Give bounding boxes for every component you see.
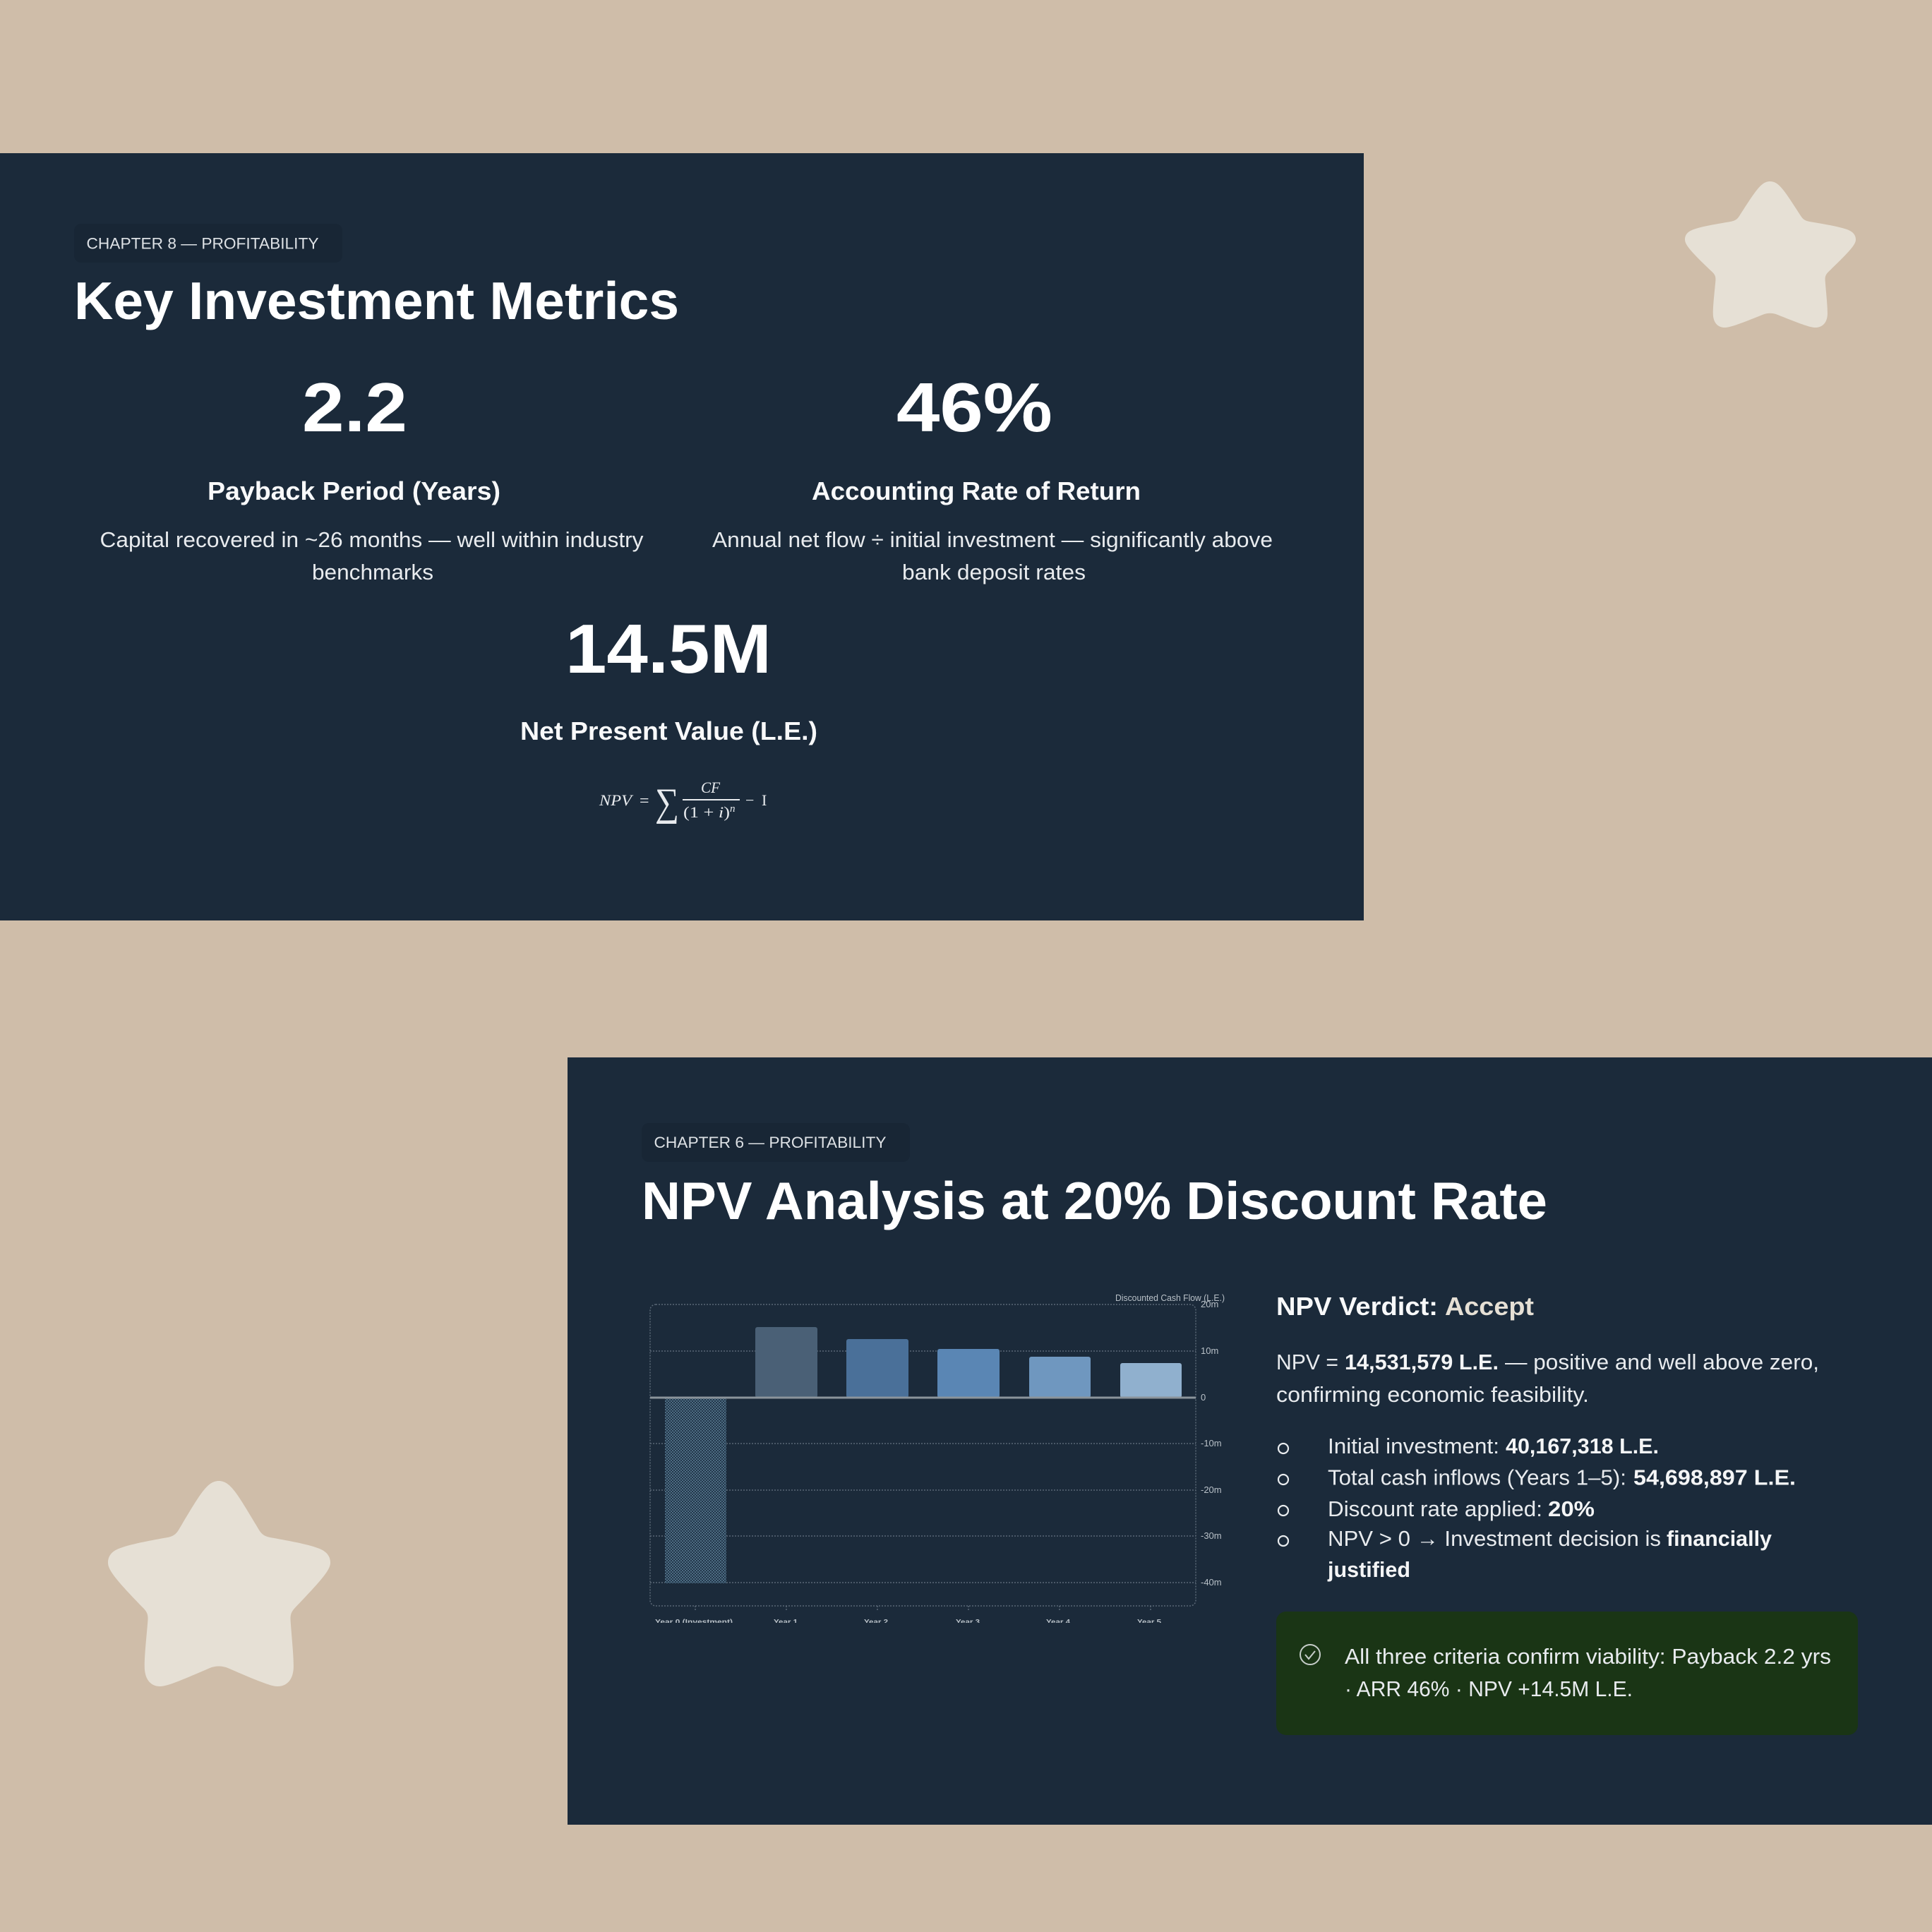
- heading: NPV verdict: [1276, 1292, 1534, 1321]
- x axis labels: Year 0 (Investment): [655, 1618, 733, 1626]
- metric: payback period: benchmarks: [312, 560, 433, 584]
- chapter badge: CHAPTER 8 — PROFITABILITY: [86, 234, 319, 253]
- bar chart: discounted cash flow: [650, 1292, 1225, 1626]
- metric: accounting rate of return: bank deposit rates: [902, 560, 1086, 584]
- panel: NPV analysis: [568, 1057, 1932, 1825]
- bullet list: NPV inputs: [1278, 1434, 1796, 1582]
- chart title: Discounted Cash Flow (L.E.): [1115, 1292, 1225, 1303]
- metric: payback period: Payback Period (Years): [208, 476, 500, 505]
- metric: accounting rate of return: Accounting Rate of Return: [812, 476, 1141, 505]
- bullet list: NPV inputs: financially: [1667, 1526, 1772, 1551]
- heading: NPV verdict: NPV Verdict:: [1276, 1292, 1438, 1321]
- NPV formula: −: [745, 791, 754, 809]
- NPV formula: NPV: [599, 791, 634, 809]
- decorative star: bottom left: [108, 1481, 330, 1686]
- x axis labels: Year 5: [1137, 1618, 1161, 1626]
- metric: net present value: [520, 610, 817, 824]
- bar: year 1: [755, 1327, 817, 1398]
- heading: NPV verdict: Accept: [1445, 1292, 1534, 1321]
- heading: NPV Analysis at 20% Discount Rate: NPV Analysis at 20% Discount Rate: [642, 1171, 1547, 1230]
- chapter badge: [74, 224, 342, 263]
- bar: year 5: [1120, 1363, 1182, 1398]
- bullet list: NPV inputs: NPV > 0 → Investment decision is: [1328, 1526, 1661, 1551]
- NPV formula: (1 + i): [683, 803, 730, 821]
- metric: payback period: 2.2: [302, 368, 407, 446]
- y axis labels: -10m: [1201, 1438, 1222, 1448]
- bullet list: NPV inputs: Discount rate applied:: [1328, 1496, 1542, 1521]
- metric: accounting rate of return: 46%: [896, 368, 1052, 446]
- bullet list: NPV inputs: 40,167,318 L.E.: [1506, 1434, 1659, 1458]
- x axis labels: Year 1: [774, 1618, 798, 1626]
- text block: NPV summary: [1276, 1350, 1819, 1407]
- bar: year 2: [846, 1339, 908, 1398]
- bullet list: NPV inputs: 54,698,897 L.E.: [1633, 1465, 1796, 1489]
- callout: all three criteria: All three criteria confirm viability: Payback 2.2 yrs: [1345, 1644, 1831, 1669]
- heading: Key Investment Metrics: Key Investment Metrics: [74, 271, 679, 330]
- bullet list: NPV inputs: 20%: [1548, 1496, 1595, 1521]
- y axis labels: -30m: [1201, 1530, 1222, 1541]
- chapter badge: [642, 1123, 910, 1162]
- decorative star: top right: [1685, 181, 1856, 328]
- y axis labels: 20m: [1201, 1299, 1218, 1309]
- x axis labels: Year 3: [956, 1618, 980, 1626]
- text block: NPV summary: NPV =: [1276, 1350, 1338, 1374]
- text block: NPV summary: 14,531,579 L.E.: [1345, 1350, 1499, 1374]
- x axis labels: [655, 1619, 1161, 1623]
- metric: payback period: Capital recovered in ~26 months — well within industry: [100, 527, 644, 552]
- icon: check circle: [1300, 1645, 1320, 1664]
- metric: payback period: [100, 368, 644, 584]
- NPV formula: n: [730, 803, 736, 815]
- bar: year 0: [665, 1398, 726, 1583]
- bullet list: NPV inputs: Total cash inflows (Years 1–5):: [1328, 1465, 1626, 1489]
- y axis labels: 0: [1201, 1392, 1206, 1403]
- text block: NPV summary: — positive and well above zero,: [1505, 1350, 1819, 1374]
- metric: accounting rate of return: Annual net flow ÷ initial investment — significantly above: [712, 527, 1273, 552]
- metric: accounting rate of return: [712, 368, 1273, 584]
- bullet list: NPV inputs: Initial investment:: [1328, 1434, 1499, 1458]
- y axis labels: -20m: [1201, 1484, 1222, 1495]
- text block: NPV summary: confirming economic feasibility.: [1276, 1382, 1589, 1407]
- callout: all three criteria: · ARR 46% · NPV +14.5M L.E.: [1345, 1676, 1633, 1701]
- bullet list: NPV inputs: justified: [1327, 1557, 1410, 1582]
- x axis labels: Year 4: [1046, 1618, 1070, 1626]
- bar: year 4: [1029, 1357, 1091, 1398]
- NPV formula: I: [762, 791, 767, 809]
- y axis labels: [1201, 1299, 1222, 1588]
- NPV formula: ∑: [655, 781, 679, 824]
- bar: year 3: [937, 1349, 1000, 1398]
- x axis labels: Year 2: [864, 1618, 888, 1626]
- metric: net present value: 14.5M: [565, 610, 772, 688]
- NPV formula: CF: [701, 779, 721, 796]
- y axis labels: -40m: [1201, 1577, 1222, 1588]
- callout: all three criteria: [1276, 1612, 1858, 1735]
- chapter badge: CHAPTER 6 — PROFITABILITY: [654, 1134, 887, 1151]
- NPV formula: [599, 779, 767, 824]
- y axis labels: 10m: [1201, 1345, 1218, 1356]
- panel: key investment metrics: [0, 153, 1364, 920]
- metric: net present value: Net Present Value (L.E.): [520, 716, 817, 745]
- NPV formula: =: [640, 792, 649, 810]
